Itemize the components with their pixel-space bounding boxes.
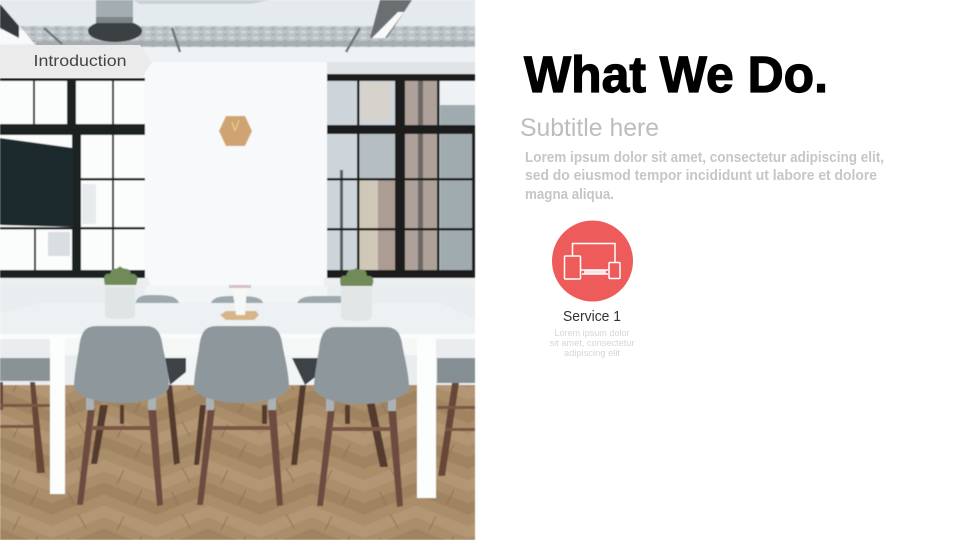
window sills [0,278,475,287]
tab label: Introduction [34,53,126,70]
table centerpiece [220,285,259,320]
back chairs [135,295,342,306]
service text: sit amet, consectetur [550,338,634,348]
wall-mounted TV [0,138,73,227]
section tab [0,45,152,78]
body text: sed do eiusmod tempor incididunt ut labore et dolore [525,167,877,184]
front chairs [74,326,169,506]
title: What We Do. [524,46,828,103]
left window [0,78,145,280]
plants [104,266,373,321]
service text: adipiscing elit [564,348,621,358]
right window [327,62,475,278]
ceiling [0,0,475,30]
icon: devices [552,220,633,302]
service text: Lorem ipsum dolor [554,328,630,338]
service heading: Service 1 [563,309,621,325]
wall [0,0,475,390]
service 1 [550,220,634,358]
table [0,303,475,498]
body text: Lorem ipsum dolor sit amet, consectetur adipiscing elit, [525,149,884,166]
subtitle: Subtitle here [520,114,659,142]
cable tray [20,26,475,52]
floor [0,385,475,540]
ceiling light [370,0,412,38]
ceiling diffuser [88,20,142,42]
ceiling duct [96,0,270,20]
body text [525,149,884,203]
service text [550,328,634,358]
wall clock [219,116,252,146]
body text: magna aliqua. [525,186,614,203]
side chairs [0,358,475,476]
photo: meeting room [0,0,475,540]
